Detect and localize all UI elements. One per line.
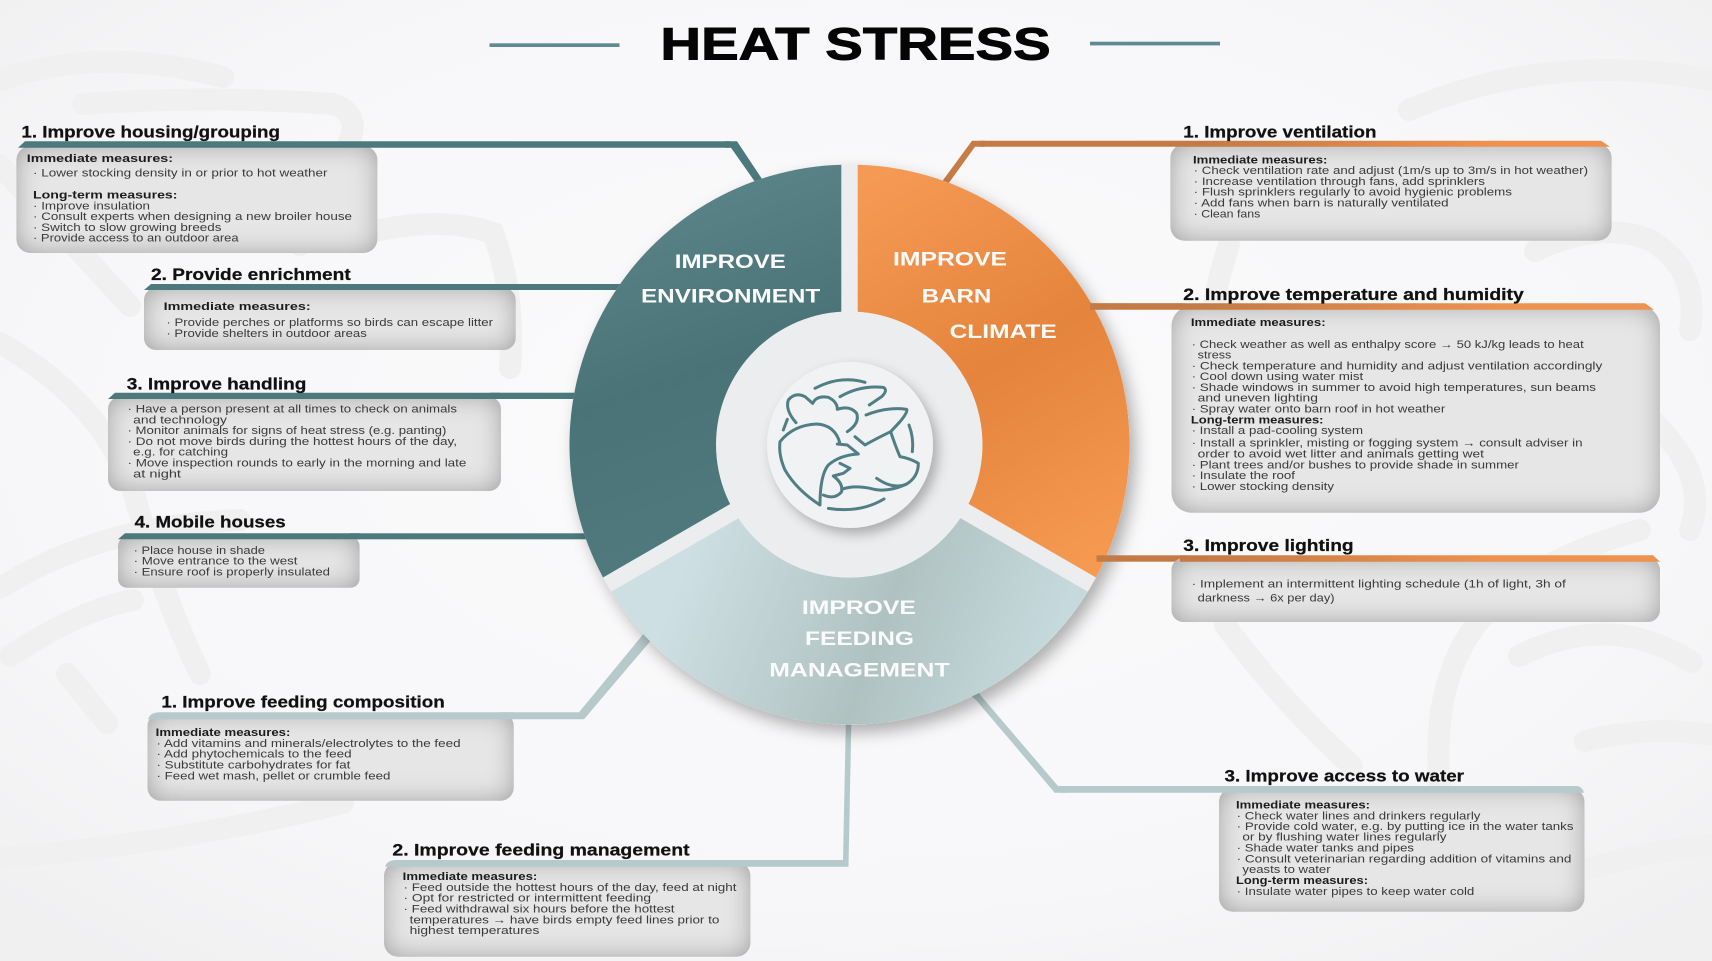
label: improve barn climate: BARN bbox=[922, 286, 991, 308]
label: improve environment: ENVIRONMENT bbox=[641, 286, 820, 308]
measures text: · Switch to slow growing breeds bbox=[33, 222, 222, 234]
measures text: Immediate measures: bbox=[403, 871, 537, 883]
measures text: · Place house in shade bbox=[134, 545, 265, 557]
measures text: Immediate measures: bbox=[27, 153, 173, 165]
measures text: · Insulate water pipes to keep water cold bbox=[1237, 886, 1474, 898]
panel: improve temperature and humidity bbox=[1090, 285, 1660, 513]
measures text: · Move inspection rounds to early in the morning and late bbox=[128, 458, 466, 470]
measures text: · Install a pad-cooling system bbox=[1192, 425, 1363, 437]
heading: 4. Mobile houses bbox=[135, 513, 286, 532]
heading: 2. Provide enrichment bbox=[151, 265, 351, 284]
measures text: · Lower stocking density bbox=[1192, 481, 1334, 493]
label: improve feeding management: MANAGEMENT bbox=[769, 660, 950, 682]
measures text: Immediate measures: bbox=[164, 301, 311, 313]
measures text: · Check ventilation rate and adjust (1m/s up to 3m/s in hot weather) bbox=[1194, 165, 1588, 177]
box bbox=[1219, 788, 1584, 912]
measures text: · Move entrance to the west bbox=[134, 556, 299, 568]
title: HEAT STRESS bbox=[660, 18, 1051, 69]
heading: 2. Improve temperature and humidity bbox=[1183, 285, 1524, 304]
measures text: temperatures → have birds empty feed lines prior to bbox=[410, 914, 719, 926]
measures text: · Provide shelters in outdoor areas bbox=[166, 328, 367, 340]
measures text: · Lower stocking density in or prior to hot weather bbox=[33, 168, 328, 180]
measures text: darkness → 6x per day) bbox=[1198, 593, 1335, 605]
panel: improve housing/grouping bbox=[16, 123, 730, 253]
measures text: · Clean fans bbox=[1194, 208, 1261, 220]
bar bbox=[148, 712, 514, 719]
measures text: · Add vitamins and minerals/electrolytes to the feed bbox=[156, 738, 461, 750]
heading: 3. Improve access to water bbox=[1224, 767, 1464, 786]
connector: handling bbox=[490, 393, 580, 399]
label: improve environment: IMPROVE bbox=[675, 251, 786, 273]
centre ring bbox=[716, 312, 982, 578]
panel: mobile houses bbox=[118, 513, 360, 588]
measures text: · Add fans when barn is naturally ventilated bbox=[1194, 197, 1449, 209]
measures text bbox=[403, 871, 738, 937]
measures text: order to avoid wet litter and animals getting wet bbox=[1198, 448, 1485, 460]
panel: improve feeding composition bbox=[148, 692, 514, 801]
measures text: · Shade water tanks and pipes bbox=[1237, 843, 1414, 855]
measures text: · Provide perches or platforms so birds can escape litter bbox=[166, 317, 493, 329]
measures text: · Add phytochemicals to the feed bbox=[156, 749, 352, 761]
label: improve feeding management: IMPROVE bbox=[802, 597, 916, 619]
box bbox=[148, 713, 514, 801]
measures text: · Improve insulation bbox=[33, 200, 150, 212]
measures text: · Monitor animals for signs of heat stress (e.g. panting) bbox=[128, 425, 447, 437]
measures text bbox=[164, 301, 493, 340]
bar bbox=[108, 393, 500, 399]
box bbox=[1170, 144, 1612, 241]
measures text: · Feed withdrawal six hours before the hottest bbox=[404, 904, 676, 916]
measures text: stress bbox=[1198, 350, 1232, 362]
connector: housing diagonal bbox=[725, 141, 766, 189]
bar bbox=[1090, 303, 1654, 310]
measures text: · Feed outside the hottest hours of the day, feed at night bbox=[404, 882, 738, 894]
box bbox=[108, 397, 501, 491]
label: improve feeding management: FEEDING bbox=[805, 628, 914, 650]
measures text: · Check water lines and drinkers regularly bbox=[1237, 810, 1481, 822]
segment: improve barn climate bbox=[858, 165, 1130, 577]
measures text: at night bbox=[133, 468, 182, 480]
bar bbox=[980, 141, 1610, 147]
connector: enrichment bbox=[500, 284, 630, 290]
heading: 3. Improve handling bbox=[127, 374, 306, 393]
measures text: · Feed wet mash, pellet or crumble feed bbox=[156, 770, 390, 782]
measures text: · Check weather as well as enthalpy score → 50 kJ/kg leads to heat bbox=[1192, 339, 1585, 351]
measures text bbox=[1236, 799, 1574, 898]
measures text: · Substitute carbohydrates for fat bbox=[156, 760, 351, 772]
measures text: · Increase ventilation through fans, add sprinklers bbox=[1194, 176, 1485, 188]
measures text: yeasts to water bbox=[1242, 864, 1331, 876]
measures text: · Flush sprinklers regularly to avoid hygienic problems bbox=[1194, 187, 1512, 199]
connector: ventilation diagonal bbox=[938, 141, 985, 191]
connector: feeding composition diagonal bbox=[500, 632, 653, 719]
connector: access to water diagonal bbox=[962, 682, 1070, 793]
heading: 1. Improve feeding composition bbox=[161, 692, 445, 711]
label: improve environment bbox=[641, 251, 820, 308]
measures text: highest temperatures bbox=[410, 925, 540, 937]
measures text bbox=[156, 727, 461, 782]
measures text: Immediate measures: bbox=[156, 727, 290, 739]
measures text: · Consult veterinarian regarding addition of vitamins and bbox=[1237, 853, 1571, 865]
measures text: · Shade windows in summer to avoid high temperatures, sun beams bbox=[1192, 382, 1596, 394]
measures text: · Ensure roof is properly insulated bbox=[134, 567, 330, 579]
measures text: Long-term measures: bbox=[1236, 875, 1368, 887]
box bbox=[118, 537, 360, 588]
measures text: Immediate measures: bbox=[1191, 317, 1326, 329]
measures text: and uneven lighting bbox=[1198, 393, 1318, 405]
heading: 2. Improve feeding management bbox=[392, 840, 690, 859]
label: improve barn climate bbox=[893, 248, 1057, 343]
measures text: Long-term measures: bbox=[33, 189, 178, 201]
measures text bbox=[27, 153, 352, 245]
label: improve barn climate: CLIMATE bbox=[950, 321, 1057, 343]
panel: improve ventilation bbox=[980, 122, 1612, 241]
measures text: · Have a person present at all times to check on animals bbox=[128, 404, 457, 416]
connector: temperature bbox=[1085, 303, 1185, 309]
measures text: · Provide access to an outdoor area bbox=[33, 233, 239, 245]
heading: 1. Improve ventilation bbox=[1183, 122, 1376, 141]
icon: chicken and pig bbox=[780, 380, 918, 510]
measures text: · Plant trees and/or bushes to provide shade in summer bbox=[1192, 459, 1519, 471]
donut base disc bbox=[570, 165, 1130, 725]
measures text: and technology bbox=[133, 414, 227, 426]
heading: 1. Improve housing/grouping bbox=[21, 123, 280, 142]
measures text: · Implement an intermittent lighting schedule (1h of light, 3h of bbox=[1192, 578, 1567, 590]
measures text: · Check temperature and humidity and adjust ventilation accordingly bbox=[1192, 360, 1603, 372]
measures text: Long-term measures: bbox=[1191, 414, 1324, 426]
box bbox=[384, 862, 750, 957]
measures text bbox=[1192, 578, 1567, 605]
panel: improve feeding management bbox=[384, 840, 750, 957]
measures text bbox=[1193, 154, 1588, 220]
title rule left bbox=[490, 43, 620, 47]
label: improve barn climate: IMPROVE bbox=[893, 248, 1007, 270]
measures text bbox=[1191, 317, 1603, 493]
box bbox=[1172, 306, 1660, 513]
measures text: Immediate measures: bbox=[1193, 154, 1327, 166]
measures text bbox=[128, 404, 466, 480]
heading: 3. Improve lighting bbox=[1183, 536, 1354, 555]
measures text bbox=[134, 545, 330, 579]
donut chart bbox=[569, 165, 1130, 725]
panel: improve access to water bbox=[1060, 767, 1584, 912]
bar bbox=[1180, 555, 1660, 562]
box bbox=[144, 288, 516, 350]
box bbox=[1172, 558, 1660, 622]
bar bbox=[385, 860, 750, 867]
bar bbox=[118, 533, 360, 539]
measures text: · Install a sprinkler, misting or fogging system → consult adviser in bbox=[1192, 438, 1583, 450]
centre disc bbox=[767, 362, 933, 528]
measures text: · Provide cold water, e.g. by putting ice in the water tanks bbox=[1237, 821, 1574, 833]
panel: improve handling bbox=[108, 374, 501, 491]
measures text: · Insulate the roof bbox=[1192, 470, 1296, 482]
box bbox=[16, 146, 377, 253]
connector: feeding management vertical bbox=[740, 715, 852, 867]
title rule right bbox=[1090, 42, 1220, 45]
connector: lighting bbox=[1096, 555, 1186, 562]
measures text: · Cool down using water mist bbox=[1192, 371, 1364, 383]
measures text: · Consult experts when designing a new broiler house bbox=[33, 211, 352, 223]
bar bbox=[144, 284, 510, 290]
panel: improve lighting bbox=[1172, 536, 1660, 622]
bar bbox=[18, 141, 730, 148]
measures text: Immediate measures: bbox=[1236, 799, 1370, 811]
bar bbox=[1060, 786, 1584, 793]
measures text: · Do not move birds during the hottest hours of the day, bbox=[128, 436, 457, 448]
label: improve feeding management bbox=[769, 597, 950, 682]
panel: provide enrichment bbox=[144, 265, 516, 350]
segment: improve feeding management bbox=[611, 518, 1088, 725]
segment: improve environment bbox=[569, 165, 841, 577]
connector: mobile houses bbox=[350, 533, 595, 539]
measures text: e.g. for catching bbox=[133, 447, 228, 459]
measures text: or by flushing water lines regularly bbox=[1242, 832, 1447, 844]
measures text: · Spray water onto barn roof in hot weather bbox=[1192, 403, 1446, 415]
measures text: · Opt for restricted or intermittent feeding bbox=[404, 893, 651, 905]
